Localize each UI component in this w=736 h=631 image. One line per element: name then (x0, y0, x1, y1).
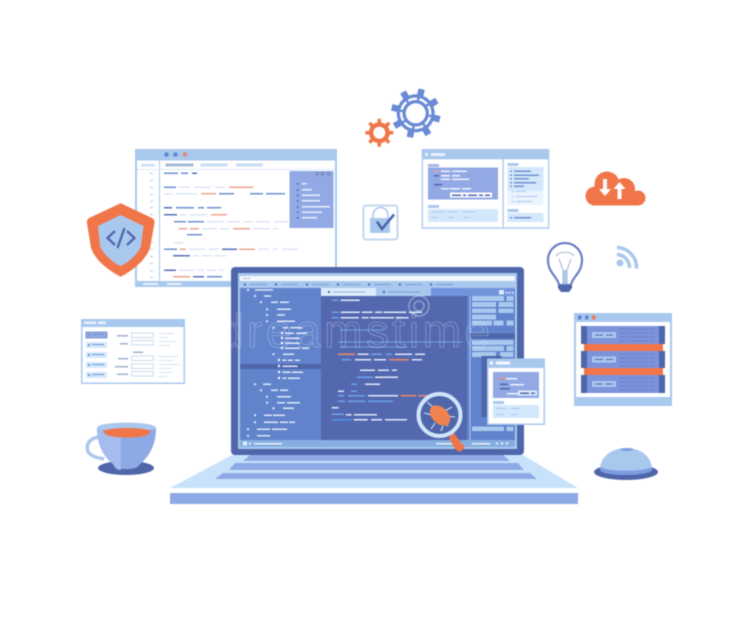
icon: lock with check mark (364, 206, 398, 240)
panel: laptop (170, 267, 578, 504)
icon: tea cup on saucer (87, 423, 156, 475)
panel: form window left (81, 319, 185, 384)
icon: small orange gear (365, 119, 393, 147)
server unit 1 (581, 326, 665, 344)
right tools panel (467, 290, 515, 440)
icon: shield with code symbol (87, 203, 155, 277)
icon: magnifier with bug (418, 394, 465, 452)
icon: light bulb (548, 243, 582, 292)
status bar (240, 440, 515, 447)
icon: computer mouse (594, 448, 658, 480)
watermark: dreamstime (218, 305, 490, 357)
icon: cloud with upload and download arrows (586, 172, 646, 206)
bug (424, 401, 455, 431)
icon: wifi signal (616, 248, 637, 268)
icon: large blue gear (386, 83, 446, 143)
panel: code editor window top left (135, 149, 337, 287)
server unit 2 (581, 351, 665, 368)
laptop screen (218, 267, 524, 455)
code editor area (321, 288, 515, 440)
popup: code completion list (290, 171, 334, 228)
laptop keyboard deck (170, 455, 578, 504)
panel: properties window top right (422, 149, 549, 229)
server unit 3 (581, 375, 665, 393)
panel: server rack window (574, 313, 672, 406)
file tree panel (240, 288, 321, 440)
panel: small file window overlapping screen (482, 356, 545, 425)
